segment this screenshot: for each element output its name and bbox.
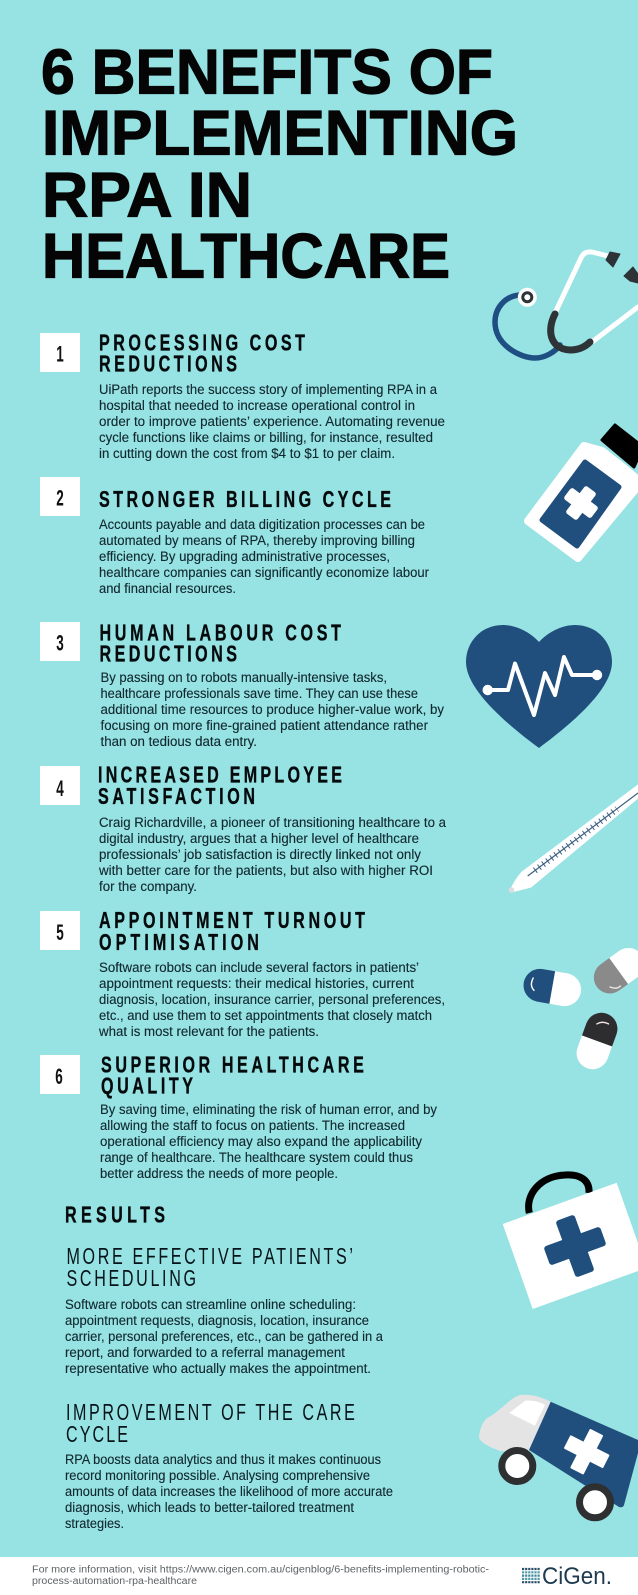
body text care cycle: amounts of data increases the likelihood of more accurate [65,1484,393,1499]
heading: processing cost reductions [99,331,305,377]
body text scheduling [65,1297,383,1376]
body text care cycle: record monitoring possible. Analysing comprehensive [65,1468,370,1483]
footer source text: process-automation-rpa-healthcare [32,1576,197,1587]
heading: human labour cost reductions: HUMAN LABOUR COST [100,621,341,646]
body text care cycle: strategies. [65,1516,124,1531]
heading: more effective patients' scheduling: SCHEDULING [66,1266,196,1292]
body text scheduling: Software robots can streamline online scheduling: [65,1297,356,1312]
heading: more effective patients' scheduling [66,1244,353,1292]
body text 3 [100,670,444,749]
body text 6: By saving time, eliminating the risk of human error, and by [100,1102,437,1117]
title: 6 BENEFITS OF [41,38,493,108]
footer source text: For more information, visit https://www.cigen.com.au/cigenblog/6-benefits-implementing-robotic- [32,1564,489,1576]
heading: human labour cost reductions [100,621,341,667]
footer bar [0,1557,638,1595]
number badge 6 [40,1055,80,1094]
icon: first aid kit [503,1175,638,1309]
panel: result care cycle [65,1400,393,1531]
heading: stronger billing cycle: STRONGER BILLING CYCLE [99,487,391,513]
heading: increased employee satisfaction: SATISFACTION [98,784,255,810]
body text 6: operational efficiency may also expand the applicability [100,1134,422,1149]
panel: result scheduling [65,1244,383,1376]
body text care cycle [65,1452,393,1531]
body text 3: By passing on to robots manually-intensive tasks, [100,670,387,685]
pill: black [572,1008,622,1074]
body text 1: order to improve patients’ experience. Automating revenue [99,414,445,429]
body text 2: automated by means of RPA, thereby improving billing [99,533,415,548]
body text 5 [98,960,445,1039]
body text 5: what is most relevant for the patients. [98,1024,319,1039]
number badge 5 [40,911,80,950]
heading: processing cost reductions: REDUCTIONS [99,352,237,377]
body text 2: healthcare companies can significantly economize labour [99,565,429,580]
icon: ambulance [479,1395,638,1518]
number badge 4: 4 [56,775,64,801]
logo: CiGen: CiGen. [542,1563,612,1590]
body text 1: in cutting down the cost from $4 to $1 to per claim. [99,446,395,461]
number badge 2 [40,477,80,516]
body text 4: Craig Richardville, a pioneer of transitioning healthcare to a [99,815,446,830]
number badge 3 [40,622,80,661]
body text care cycle: RPA boosts data analytics and thus it makes continuous [65,1452,381,1467]
body text 4: professionals’ job satisfaction is directly linked not only [99,847,421,862]
body text 6 [100,1102,437,1181]
number badge 3: 3 [56,630,64,656]
body text 1: UiPath reports the success story of implementing RPA in a [99,382,437,397]
number badge 2: 2 [56,485,64,511]
heading: improvement of the care cycle: CYCLE [66,1422,128,1448]
heading: processing cost reductions: PROCESSING COST [99,331,305,356]
body text 2: Accounts payable and data digitization processes can be [99,517,425,532]
panel: benefit 5 [40,908,445,1039]
title: IMPLEMENTING [42,98,518,168]
title: RPA IN [42,160,252,230]
number badge 6: 6 [55,1063,63,1089]
body text 4: for the company. [99,879,197,894]
body text 1 [99,382,445,461]
number badge 1: 1 [56,341,64,367]
body text 3: than on tedious data entry. [100,734,257,749]
body text scheduling: representative who actually makes the appointment. [65,1361,371,1376]
icon: medicine bottle [528,425,638,558]
body text 3: focusing on more fine-grained patient attendance rather [100,718,428,733]
heading: superior healthcare quality: SUPERIOR HEALTHCARE [101,1053,364,1078]
body text 6: allowing the staff to focus on patients. The increased [100,1118,405,1133]
heading: increased employee satisfaction: INCREASED EMPLOYEE [98,763,342,788]
icon: heart with pulse [466,625,612,748]
number badge 4 [40,766,80,805]
heading: improvement of the care cycle: IMPROVEMENT OF THE CARE [66,1400,355,1426]
number badge 1 [40,333,80,372]
body text 5: Software robots can include several factors in patients’ [99,960,419,975]
heading: appointment turnout optimisation: OPTIMISATION [99,930,259,956]
body text 2: and financial resources. [99,581,236,596]
heading: human labour cost reductions: REDUCTIONS [100,642,237,667]
pill: blue [521,966,584,1009]
body text 3: healthcare professionals save time. They can use these [100,686,418,701]
footer source text [32,1564,489,1587]
body text 6: better address the needs of more people. [100,1166,338,1181]
body text 5: appointment requests: their medical histories, current [99,976,414,991]
body text 2 [99,517,429,596]
body text 5: diagnosis, location, insurance carrier, personal preferences, [99,992,445,1007]
panel: benefit 6 [40,1053,437,1181]
icon: thermometer [509,785,638,893]
body text 2: efficiency. By upgrading administrative processes, [99,549,390,564]
title: HEALTHCARE [42,222,450,292]
panel: benefit 3 [40,621,444,749]
heading: increased employee satisfaction [98,763,342,810]
body text scheduling: appointment requests, diagnosis, location, insurance [65,1313,369,1328]
heading: appointment turnout optimisation [99,908,365,956]
panel: benefit 1 [40,331,445,461]
panel: benefit 2 [40,477,429,596]
body text scheduling: carrier, personal preferences, etc., can be gathered in a [65,1329,383,1344]
number badge 5: 5 [56,919,64,945]
heading: more effective patients' scheduling: MORE EFFECTIVE PATIENTS’ [66,1244,353,1270]
body text 5: etc., and use them to set appointments that closely match [99,1008,432,1023]
body text care cycle: diagnosis, which leads to better-tailored treatment [65,1500,354,1515]
body text 4: digital industry, argues that a higher level of healthcare [99,831,419,846]
panel: benefit 4 [40,763,446,894]
body text 1: cycle functions like claims or billing, for instance, resulted [99,430,433,445]
heading: improvement of the care cycle [66,1400,355,1448]
pill: grey [587,942,638,1000]
heading: appointment turnout optimisation: APPOINTMENT TURNOUT [99,908,365,934]
icon: stethoscope [495,252,638,358]
body text 4 [98,815,446,894]
heading: superior healthcare quality: QUALITY [101,1074,193,1099]
title [41,38,518,292]
icon: pills [521,942,638,1074]
body text 1: hospital that needed to increase operational control in [99,398,415,413]
body text 3: additional time resources to produce higher-value work, by [100,702,444,717]
body text 6: range of healthcare. The healthcare system could thus [100,1150,413,1165]
heading: results: RESULTS [65,1203,165,1228]
body text scheduling: report, and forwarded to a referral management [65,1345,345,1360]
heading: superior healthcare quality [101,1053,364,1099]
body text 4: with better care for the patients, but also with higher ROI [98,863,433,878]
